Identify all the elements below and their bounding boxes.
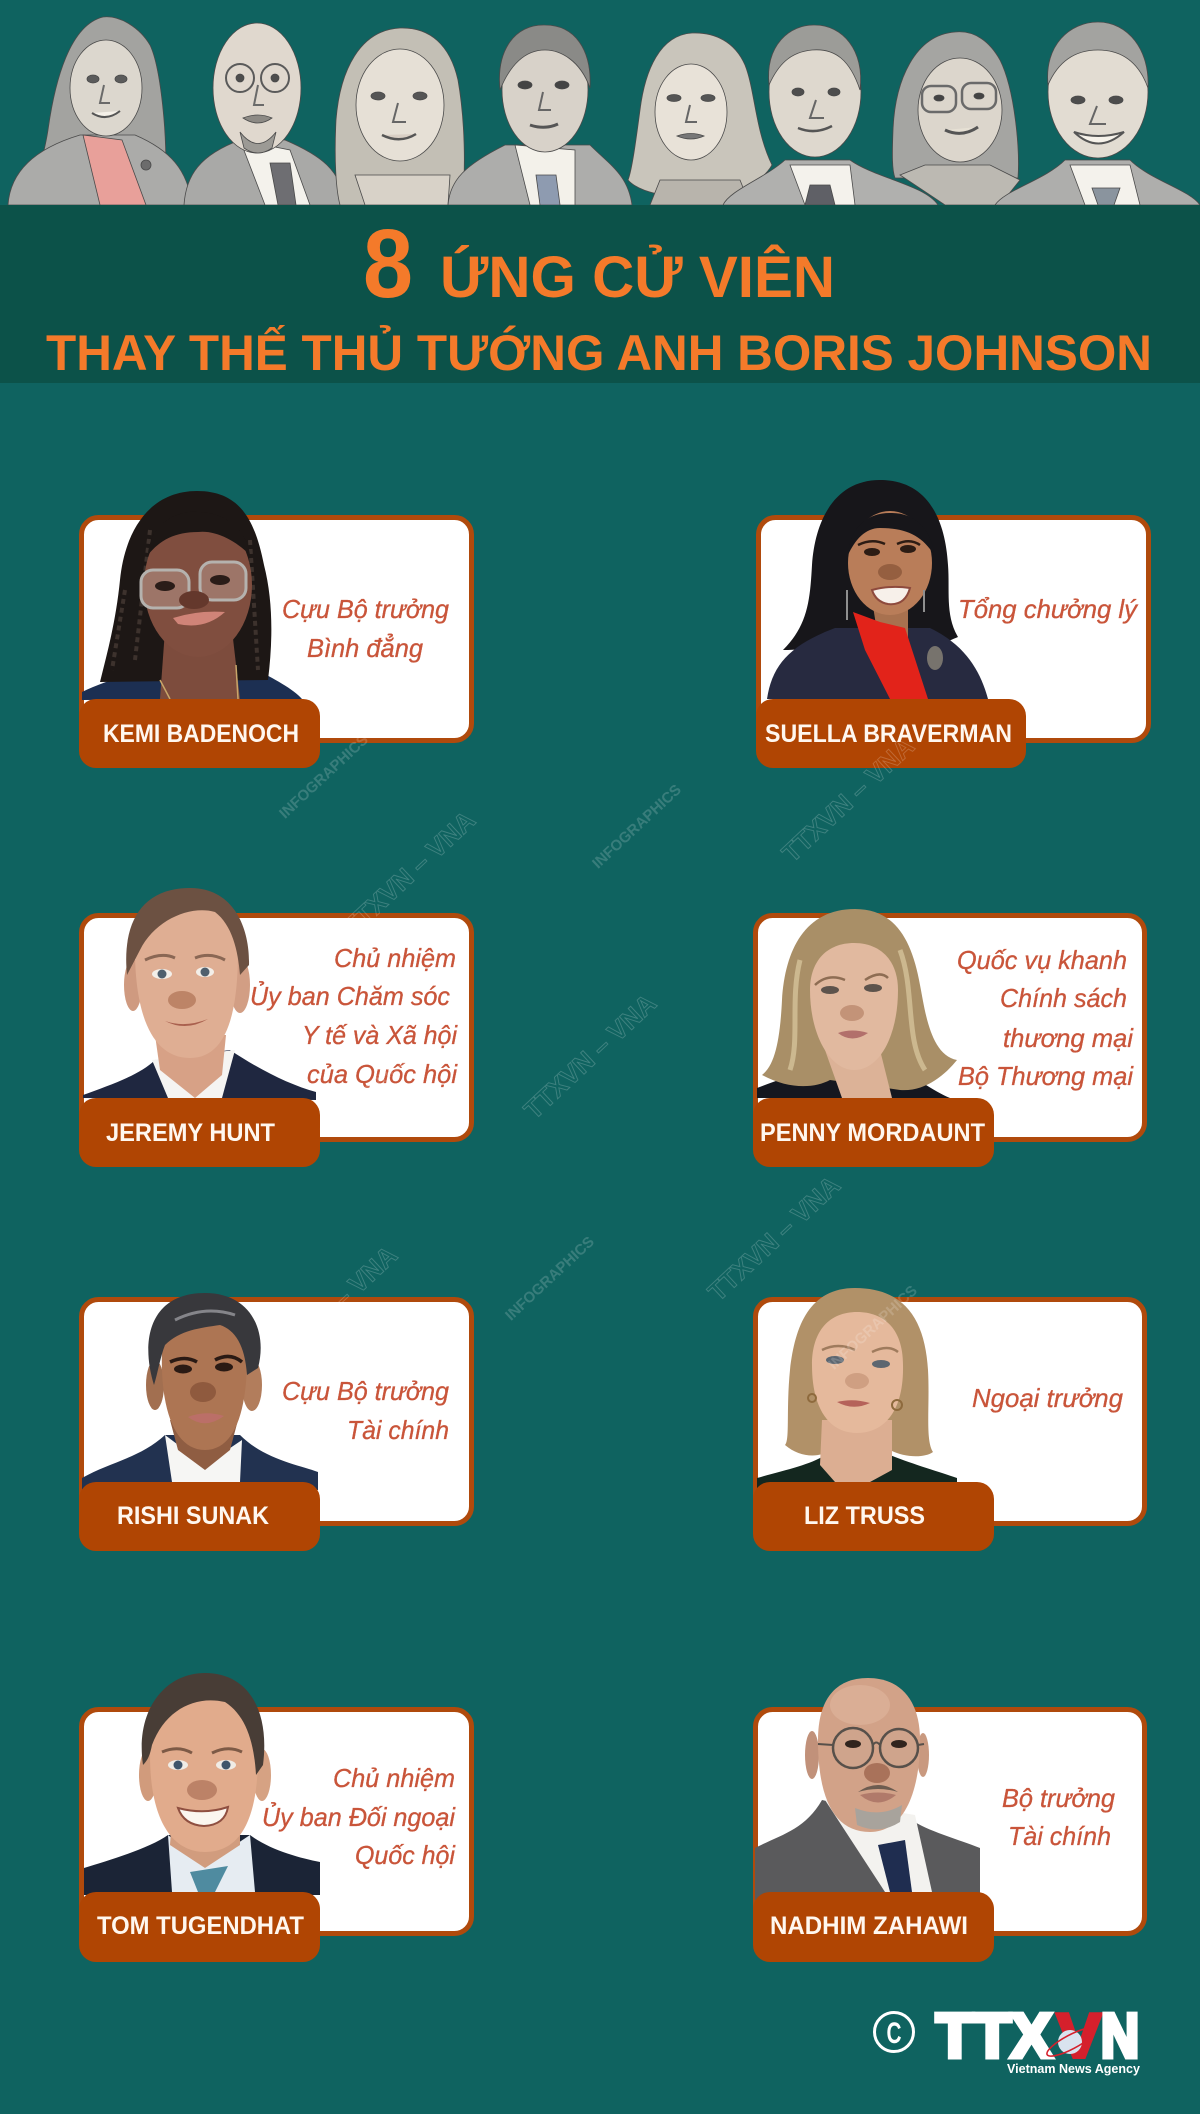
role text: [957, 945, 1134, 1091]
role text: của Quốc hội: [307, 1059, 458, 1089]
role text: Tài chính: [1008, 1821, 1111, 1851]
name plate: [756, 699, 1026, 768]
name plate: [79, 1482, 320, 1551]
name plate: [753, 1892, 994, 1962]
role text: Tổng chưởng lý: [958, 594, 1139, 624]
role text: Bộ Thương mại: [958, 1061, 1134, 1091]
role text: Ủy ban Chăm sóc: [250, 980, 450, 1011]
role text: Chính sách: [1000, 983, 1127, 1013]
role text: Quốc hội: [355, 1840, 456, 1870]
portrait: Penny Mordaunt: [757, 909, 957, 1098]
icon: globe: [1044, 2023, 1098, 2061]
card: Tom Tugendhat: [79, 1673, 472, 1962]
name plate: [79, 1892, 320, 1962]
title line 1: 8: [363, 209, 413, 318]
tagline: Vietnam News Agency: [1007, 2062, 1140, 2076]
portrait: Jeremy Hunt: [83, 888, 316, 1100]
title line 1: ỨNG CỬ VIÊN: [440, 245, 835, 310]
watermarks: INFOGRAPHICS: [276, 731, 372, 822]
name plate: [753, 1098, 994, 1167]
role text: Cựu Bộ trưởng: [282, 1376, 450, 1406]
title band: [0, 205, 1200, 383]
portrait: Suella Braverman: [767, 480, 988, 699]
watermarks: TTXVN – VNA: [518, 988, 662, 1125]
icon: copyright mark: [874, 2012, 914, 2052]
wordmark: [936, 2002, 1139, 2071]
role text: Bộ trưởng: [1002, 1783, 1116, 1813]
card: Rishi Sunak: [79, 1293, 472, 1551]
title line 1: [363, 209, 835, 318]
card: Suella Braverman: [756, 480, 1148, 768]
role text: [282, 1376, 450, 1445]
illustration: row of eight sketched candidate portraits: [8, 17, 1200, 205]
watermarks: TTXVN – VNA: [337, 805, 481, 942]
card: Kemi Badenoch: [79, 491, 472, 768]
card box: [82, 1300, 472, 1524]
card: Nadhim Zahawi: [753, 1678, 1144, 1962]
card box: [82, 916, 472, 1140]
portrait: Liz Truss: [757, 1288, 957, 1490]
card: Liz Truss: [753, 1288, 1144, 1551]
role text: Chủ nhiệm: [334, 943, 456, 973]
card: Jeremy Hunt: [79, 888, 472, 1167]
role text: Tài chính: [347, 1415, 449, 1445]
role text: [262, 1763, 456, 1870]
sketch: Penny Mordaunt: [628, 33, 772, 205]
name plate: RISHI SUNAK: [117, 1502, 269, 1530]
card: Penny Mordaunt: [753, 909, 1144, 1167]
role text: Y tế và Xã hội: [302, 1020, 458, 1050]
role text: thương mại: [1003, 1023, 1134, 1053]
portrait: Tom Tugendhat: [84, 1673, 320, 1895]
wordmark: N: [1101, 2002, 1139, 2071]
role text: Quốc vụ khanh: [957, 945, 1127, 975]
sketch: Tom Tugendhat: [995, 22, 1200, 205]
name plate: NADHIM ZAHAWI: [770, 1912, 968, 1940]
role text: Bình đẳng: [307, 633, 424, 663]
sketch: Suella Braverman: [8, 17, 192, 205]
role text: [282, 594, 450, 663]
card box: [756, 916, 1144, 1140]
wordmark: V: [1057, 2002, 1101, 2071]
name plate: [753, 1482, 994, 1551]
sketch: Kemi Badenoch: [892, 32, 1020, 205]
watermarks: INFOGRAPHICS: [825, 1282, 921, 1373]
name plate: KEMI BADENOCH: [103, 720, 299, 748]
card box: [756, 1710, 1144, 1934]
logo: TTXVN Vietnam News Agency: [874, 2002, 1140, 2076]
wordmark: TTX: [936, 2002, 1052, 2071]
portrait: Kemi Badenoch: [82, 491, 302, 700]
card box: [758, 518, 1148, 740]
name plate: JEREMY HUNT: [106, 1119, 275, 1147]
sketch: Liz Truss: [335, 28, 464, 205]
name plate: LIZ TRUSS: [804, 1502, 925, 1530]
role text: Chủ nhiệm: [333, 1763, 455, 1793]
name plate: TOM TUGENDHAT: [97, 1912, 304, 1940]
portrait: Nadhim Zahawi: [755, 1678, 980, 1900]
sketch: Jeremy Hunt: [723, 25, 938, 205]
name plate: [79, 1098, 320, 1167]
watermarks: INFOGRAPHICS: [589, 781, 685, 872]
card box: [82, 1710, 472, 1934]
role text: [1002, 1783, 1116, 1851]
role text: Ngoại trưởng: [972, 1383, 1124, 1413]
watermarks: TTXVN – VNA: [259, 1240, 403, 1377]
icon: copyright mark: C: [886, 2017, 902, 2050]
role text: Cựu Bộ trưởng: [282, 594, 450, 624]
watermarks: TTXVN – VNA: [776, 731, 920, 868]
role text: [250, 943, 458, 1089]
watermarks: [259, 731, 921, 1377]
title line 2: THAY THẾ THỦ TƯỚNG ANH BORIS JOHNSON: [46, 324, 1152, 381]
sketch: Nadhim Zahawi: [184, 23, 345, 205]
portrait: Rishi Sunak: [82, 1293, 318, 1490]
card box: [82, 518, 472, 740]
watermarks: INFOGRAPHICS: [317, 1049, 413, 1140]
role text: Ủy ban Đối ngoại: [262, 1801, 456, 1832]
watermarks: TTXVN – VNA: [702, 1170, 846, 1307]
name plate: PENNY MORDAUNT: [760, 1119, 985, 1147]
card box: [756, 1300, 1144, 1524]
watermarks: INFOGRAPHICS: [502, 1233, 598, 1324]
name plate: [79, 699, 320, 768]
sketch: Rishi Sunak: [448, 25, 632, 205]
name plate: SUELLA BRAVERMAN: [765, 720, 1012, 748]
